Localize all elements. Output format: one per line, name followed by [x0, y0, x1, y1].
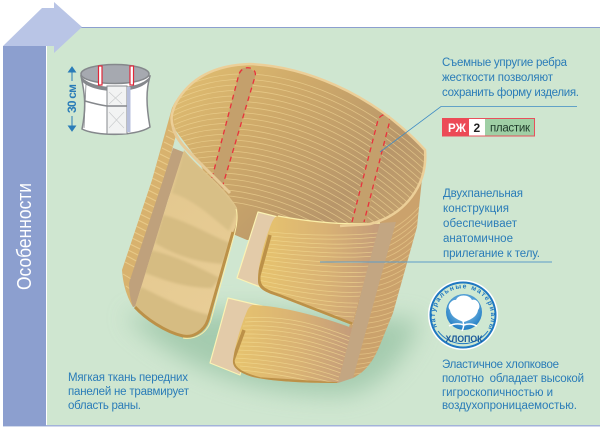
- icon: cotton badge: [428, 280, 498, 350]
- text block: stiffening ribs: жесткости позволяют: [442, 72, 554, 84]
- badge: РЖ 2 пластик: 2: [474, 121, 480, 135]
- height arrow: [68, 67, 76, 131]
- text block: soft fabric: [68, 372, 190, 412]
- badge: РЖ 2 пластик: РЖ: [448, 123, 467, 135]
- badge: РЖ 2 пластик: пластик: [490, 122, 531, 134]
- icon: thumbnail belt with height marker: [65, 64, 150, 134]
- side seam strip: [338, 222, 396, 383]
- text block: soft fabric: Мягкая ткань передних: [68, 372, 188, 384]
- text block: stiffening ribs: [442, 57, 579, 99]
- lower tab: [210, 298, 262, 375]
- text block: two-panel construction: прилегание к телу.: [443, 248, 540, 260]
- shadow under belt: [125, 310, 420, 395]
- height label: 30 см: [65, 84, 79, 113]
- left hatched wall: [122, 108, 176, 307]
- belt rim: [172, 64, 425, 226]
- sidebar heading: Особенности: [14, 183, 36, 290]
- belt illustration: [122, 62, 426, 383]
- badge: РЖ 2 пластик: [442, 118, 534, 136]
- inner left rim: [173, 127, 230, 193]
- text block: two-panel construction: [443, 188, 540, 260]
- callout line: panel: [320, 262, 552, 263]
- text block: elastic cotton: полотно обладает высокой: [442, 373, 584, 385]
- upper tab: [237, 212, 290, 290]
- text block: stiffening ribs: сохранить форму изделия.: [442, 87, 579, 99]
- rib with stitching, right: [351, 114, 391, 224]
- icon: cotton badge: ХЛОПОК: [446, 334, 483, 345]
- callout line: ribs: [380, 106, 577, 152]
- inner back wall: [172, 65, 424, 240]
- outer right wall: [338, 162, 424, 382]
- lower panel: [233, 305, 352, 388]
- text block: two-panel construction: анатомичное: [443, 233, 513, 245]
- panel top rule: [47, 27, 600, 28]
- text block: two-panel construction: Двухпанельная: [443, 188, 523, 200]
- left seam strip: [129, 148, 186, 307]
- rib with stitching, left: [212, 68, 256, 188]
- icon: corner arrow: [3, 2, 82, 53]
- panel bottom rule: [3, 425, 600, 426]
- text block: elastic cotton: Эластичное хлопковое: [442, 359, 559, 371]
- sidebar: Особенности: [3, 46, 46, 426]
- icon: cotton badge: натуральные материалы: [432, 284, 494, 330]
- left front panel with padded bands: [130, 150, 238, 340]
- upper panel: [258, 216, 380, 325]
- text block: elastic cotton: [442, 359, 584, 412]
- text block: elastic cotton: воздухопроницаемостью.: [442, 400, 577, 412]
- text block: two-panel construction: конструкция: [443, 203, 509, 215]
- text block: elastic cotton: гигроскопичностью и: [442, 387, 553, 399]
- text block: stiffening ribs: Съемные упругие ребра: [442, 57, 568, 69]
- text block: soft fabric: область раны.: [68, 400, 141, 412]
- text block: two-panel construction: обеспечивает: [443, 218, 518, 230]
- text block: soft fabric: панелей не травмирует: [68, 386, 190, 398]
